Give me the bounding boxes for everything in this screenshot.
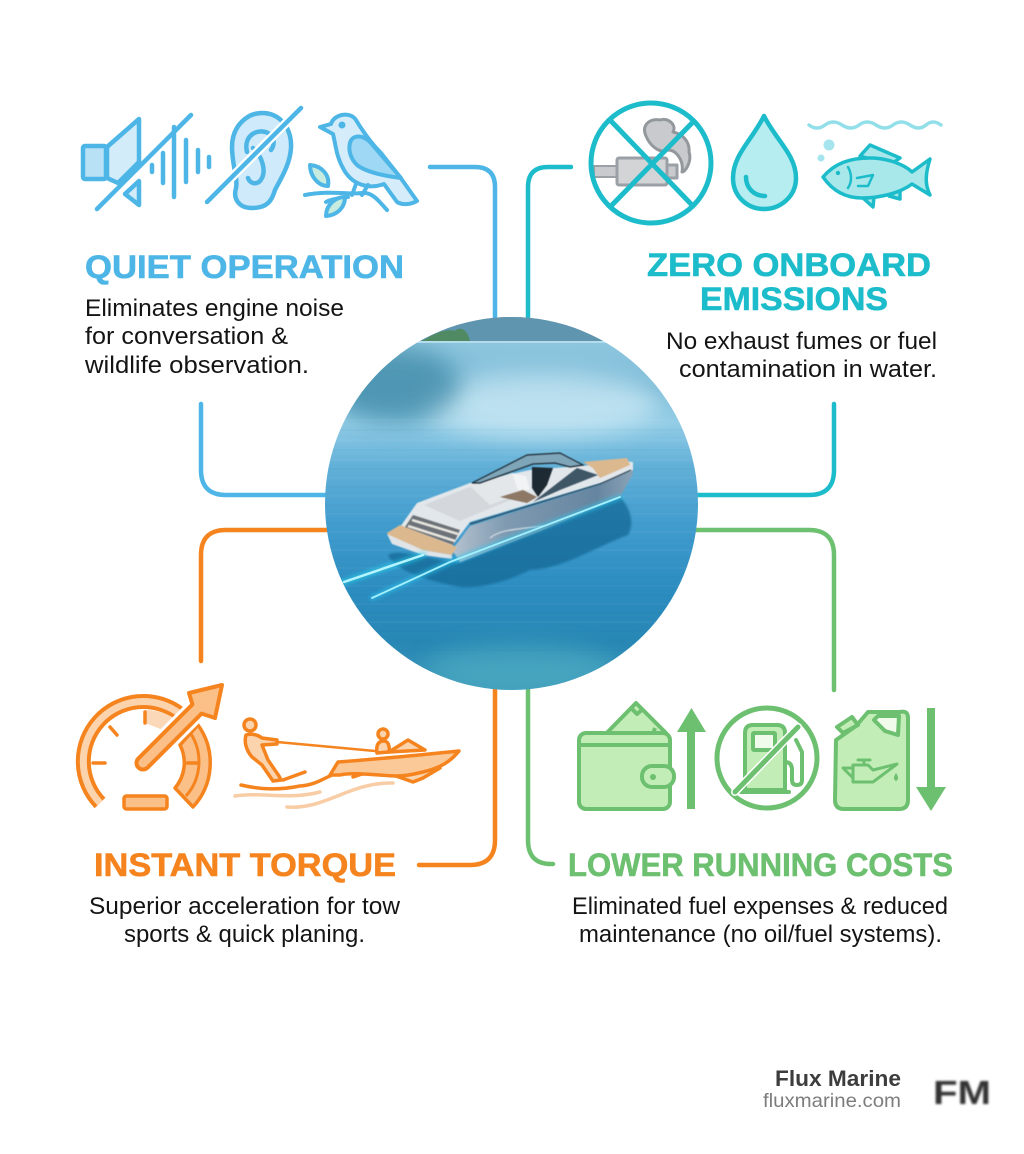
electric glow lines (344, 497, 620, 598)
water (320, 312, 704, 696)
brand name: Flux Marine (775, 1066, 901, 1091)
infographic canvas (76, 100, 990, 1107)
sun deck (425, 487, 510, 520)
white rim and deck (400, 460, 633, 546)
icon: muted speaker (83, 115, 209, 209)
connector lines: quiet operation (201, 167, 495, 495)
heading: zero onboard emissions (647, 247, 931, 317)
text: lower running costs description: maintenance (no oil/fuel systems). (579, 921, 942, 948)
text: quiet operation description: for conversation & (85, 323, 288, 350)
heading: zero onboard emissions: EMISSIONS (700, 281, 888, 317)
icon: speedometer with arrow (83, 685, 222, 809)
text: lower running costs description: Eliminated fuel expenses & reduced (572, 893, 948, 920)
text: zero onboard emissions description (666, 328, 937, 383)
heading: zero onboard emissions: ZERO ONBOARD (647, 247, 931, 283)
stern swim platform (387, 525, 457, 555)
bow deck (583, 458, 630, 478)
front windscreen (533, 468, 598, 502)
footer: Flux Marine branding (763, 1066, 991, 1112)
brand website: fluxmarine.com (763, 1090, 901, 1112)
rim shadow line (470, 470, 631, 524)
panel: lower running costs (528, 530, 953, 948)
icon: no exhaust (591, 103, 711, 223)
text: quiet operation description (84, 295, 344, 379)
text: zero onboard emissions description: No exhaust fumes or fuel (666, 328, 937, 355)
heading: quiet operation: QUIET OPERATION (85, 249, 404, 285)
boat reflection (388, 497, 631, 587)
icon: oil can with down arrow (835, 708, 946, 811)
panel: instant torque (83, 530, 495, 948)
text: zero onboard emissions description: contamination in water. (679, 356, 937, 383)
central photo: electric boat on lake (320, 312, 704, 696)
hull (452, 465, 633, 562)
icon: fish under water (809, 122, 941, 207)
heading: lower running costs: LOWER RUNNING COSTS (568, 847, 953, 883)
bimini windshield (472, 453, 583, 483)
hull decorative line (490, 526, 543, 538)
text: quiet operation description: Eliminates engine noise (85, 295, 344, 322)
heading: instant torque: INSTANT TORQUE (94, 847, 396, 883)
icon: crossed out fuel pump (717, 708, 817, 808)
icon: muted ear (207, 108, 301, 208)
text: lower running costs description (572, 893, 948, 948)
text: instant torque description: sports & quick planing. (124, 921, 365, 948)
panel: zero onboard emissions (528, 103, 941, 495)
seat and floor (472, 472, 513, 504)
icon: bird on branch (305, 115, 417, 216)
text: quiet operation description: wildlife observation. (84, 352, 309, 379)
connector lines: instant torque (201, 530, 495, 865)
panel: quiet operation (83, 108, 495, 495)
connector lines: zero onboard emissions (528, 167, 834, 495)
logo: FM monogram: FM (933, 1074, 991, 1111)
text: instant torque description: Superior acceleration for tow (89, 893, 401, 920)
boat (387, 453, 633, 562)
water reflections and ripples (322, 347, 700, 692)
stern steps (405, 515, 460, 545)
icon: water skier towed by boat (235, 719, 459, 807)
icon: water drop (733, 116, 796, 209)
icon: wallet with money and up arrow (579, 703, 706, 809)
console (532, 467, 553, 497)
connector lines: lower running costs (528, 530, 834, 864)
text: instant torque description (89, 893, 401, 948)
far shoreline and trees (416, 317, 606, 343)
